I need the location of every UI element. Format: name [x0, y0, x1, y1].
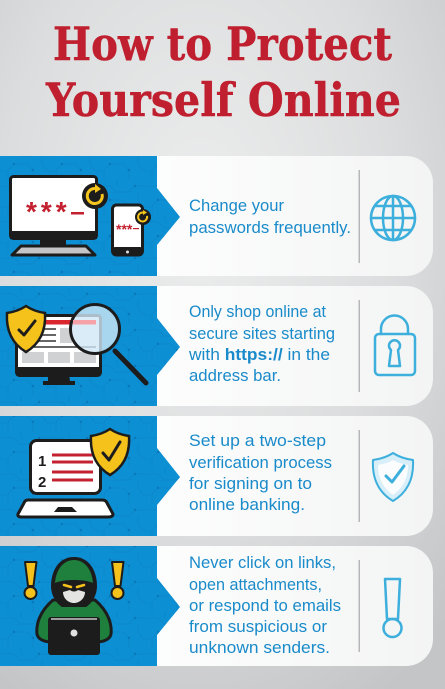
- panel: two-step verification: [0, 416, 433, 536]
- text: suspicious emails: open attachments,: [189, 576, 322, 594]
- panel: secure shopping: [0, 286, 433, 406]
- text: secure shopping: Only shop online at: [189, 303, 326, 321]
- icon: exclamation mark: [384, 579, 402, 637]
- divider: [358, 300, 360, 392]
- title: [45, 17, 401, 127]
- icon: desktop and phone with password reset: [10, 176, 151, 256]
- icon: secure site under magnifier: [7, 304, 146, 385]
- card background: [100, 156, 433, 276]
- card background: [100, 416, 433, 536]
- blue banner with arrow: [0, 156, 180, 276]
- icon: laptop with numbered steps: 2: [38, 474, 46, 491]
- text: suspicious emails: unknown senders.: [189, 639, 330, 657]
- icon: hacker with warnings: [24, 557, 124, 655]
- title: Yourself Online: [45, 73, 401, 127]
- divider: [358, 170, 360, 263]
- icon: padlock: [375, 316, 415, 375]
- text: suspicious emails: Never click on links,: [189, 554, 336, 572]
- text: secure shopping: address bar.: [189, 367, 281, 385]
- icon: desktop and phone with password reset: ***: [26, 196, 71, 227]
- divider: [358, 430, 360, 522]
- text: suspicious emails: [189, 554, 341, 657]
- icon: globe: [371, 196, 415, 240]
- icon: desktop and phone with password reset: ***: [116, 221, 133, 237]
- blue banner with arrow: [0, 286, 180, 406]
- text: two-step verification: Set up a two-step: [189, 432, 326, 450]
- panel: change passwords: [0, 156, 433, 276]
- text: secure shopping: [188, 303, 335, 385]
- text: suspicious emails: or respond to emails: [189, 597, 341, 615]
- icon: laptop with numbered steps: 1: [38, 453, 46, 470]
- divider: [358, 560, 360, 652]
- panel: suspicious emails: [0, 546, 433, 666]
- card background: [100, 546, 433, 666]
- icon: check shield: [373, 453, 413, 501]
- text: secure shopping: secure sites starting: [189, 325, 335, 343]
- blue banner with arrow: [0, 416, 180, 536]
- text: two-step verification: verification process: [189, 454, 332, 472]
- text: suspicious emails: from suspicious or: [189, 618, 328, 636]
- text: two-step verification: for signing on to: [189, 475, 312, 493]
- text: two-step verification: online banking.: [189, 496, 305, 514]
- text: two-step verification: [189, 432, 332, 514]
- text: secure shopping: with https:// in the: [188, 346, 330, 364]
- title: How to Protect: [53, 17, 393, 71]
- text: change passwords: [189, 197, 351, 237]
- card background: [100, 286, 433, 406]
- icon: laptop with numbered steps: [18, 429, 129, 517]
- blue banner with arrow: [0, 546, 180, 666]
- text: change passwords: Change your: [189, 197, 285, 215]
- text: change passwords: passwords frequently.: [189, 219, 351, 237]
